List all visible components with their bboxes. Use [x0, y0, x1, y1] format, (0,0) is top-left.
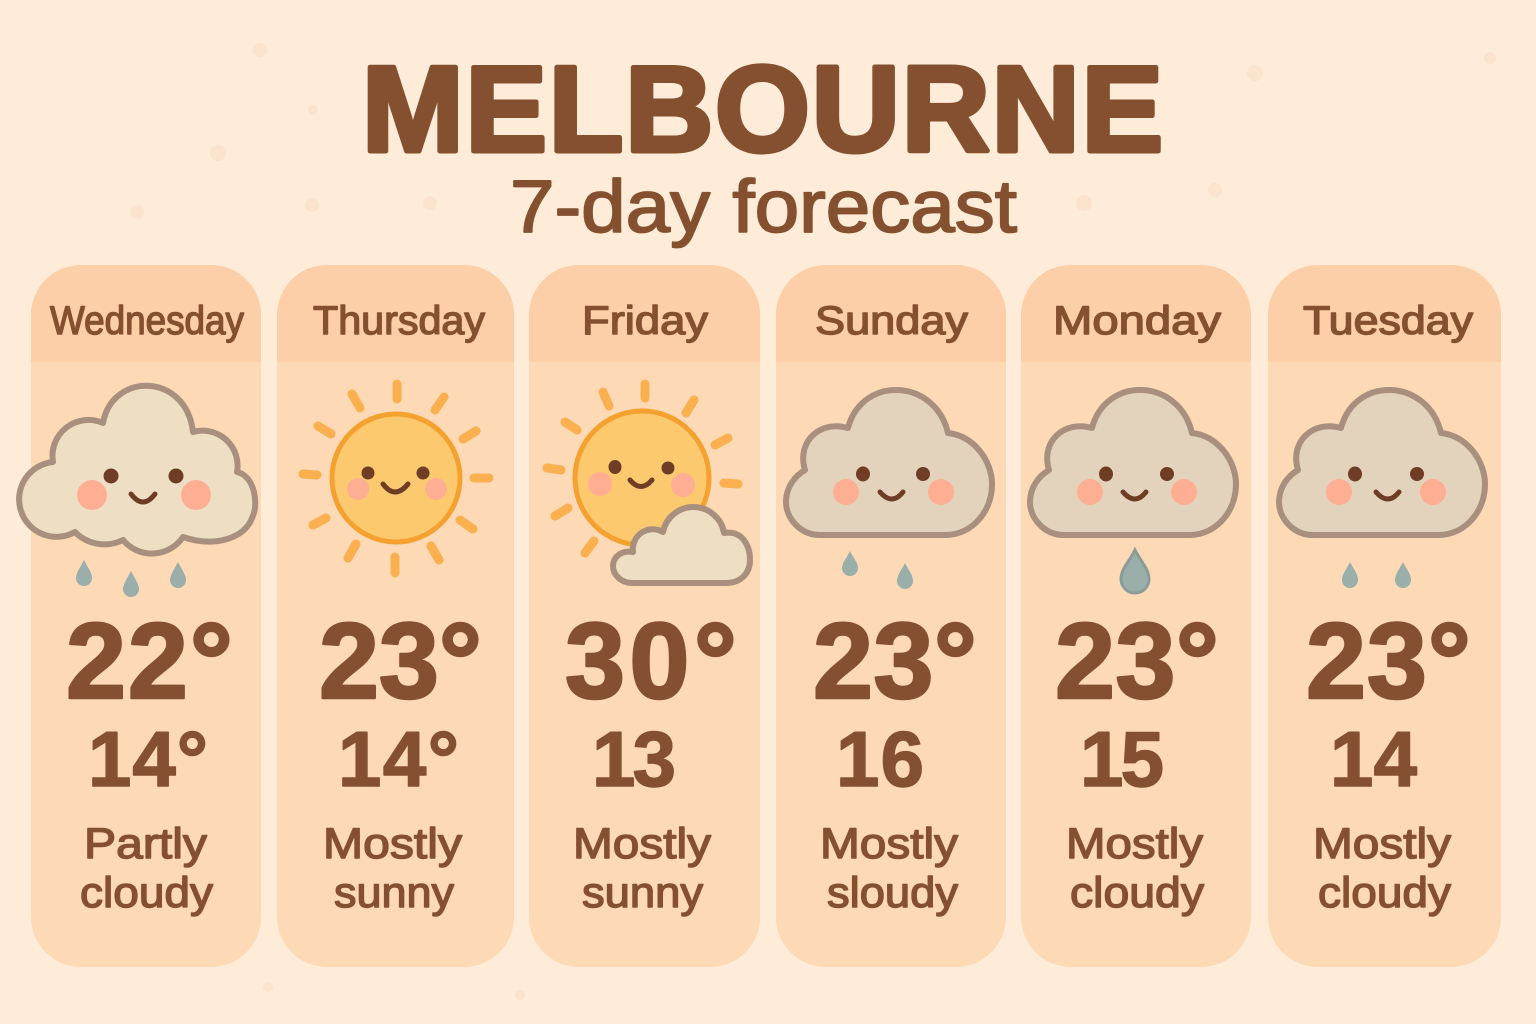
- title: MELBOURNE: [362, 41, 1163, 177]
- low temperature: 14°: [338, 715, 459, 803]
- condition text line 2: cloudy: [1318, 869, 1452, 917]
- low temperature: 16: [836, 715, 924, 803]
- high temperature: 23°: [1306, 600, 1471, 721]
- low temperature: 14: [1330, 715, 1417, 803]
- condition text line 2: cloudy: [80, 869, 214, 917]
- condition text: Mostly: [323, 820, 463, 868]
- day label: Tuesday: Tuesday: [1303, 299, 1473, 343]
- day label: Monday: Monday: [1053, 299, 1221, 343]
- day label: Wednesday: Wednesday: [50, 299, 244, 343]
- icon: smiling cloud with drops: [786, 390, 992, 589]
- high temperature: 22°: [66, 600, 233, 721]
- condition text: Mostly: [1313, 820, 1452, 868]
- day label: Friday: Friday: [582, 299, 708, 343]
- icon: smiling rain cloud: [19, 386, 255, 597]
- high temperature: 23°: [1055, 600, 1219, 721]
- low temperature: 13: [592, 715, 676, 803]
- panel: Wednesday: [19, 265, 261, 967]
- panel: Friday: [529, 265, 760, 967]
- icon: smiling sun: [303, 384, 489, 573]
- low temperature: 15: [1080, 715, 1164, 803]
- day label: Sunday: Sunday: [815, 299, 968, 343]
- condition text line 2: sunny: [334, 869, 455, 917]
- icon: smiling cloud with drops: [1279, 390, 1485, 588]
- panel: Monday: [1021, 265, 1251, 967]
- high temperature: 23°: [319, 600, 482, 721]
- panel: Sunday: [776, 265, 1006, 967]
- condition text line 2: cloudy: [1070, 869, 1205, 917]
- condition text line 2: sunny: [582, 869, 704, 917]
- panel: Thursday: [277, 265, 514, 967]
- high temperature: 30°: [565, 600, 737, 721]
- low temperature: 14°: [88, 715, 208, 803]
- day label: Thursday: Thursday: [313, 299, 485, 343]
- panel: Tuesday: [1268, 265, 1501, 967]
- condition text: Mostly: [820, 820, 959, 868]
- icon: smiling cloud with large drop: [1030, 390, 1236, 593]
- icon: sun behind cloud: [547, 384, 750, 583]
- condition text: Mostly: [1066, 820, 1204, 868]
- condition text: Mostly: [573, 820, 712, 868]
- subtitle: 7-day forecast: [510, 165, 1017, 248]
- high temperature: 23°: [813, 600, 977, 721]
- condition text line 2: sloudy: [827, 869, 959, 917]
- condition text: Partly: [84, 820, 208, 868]
